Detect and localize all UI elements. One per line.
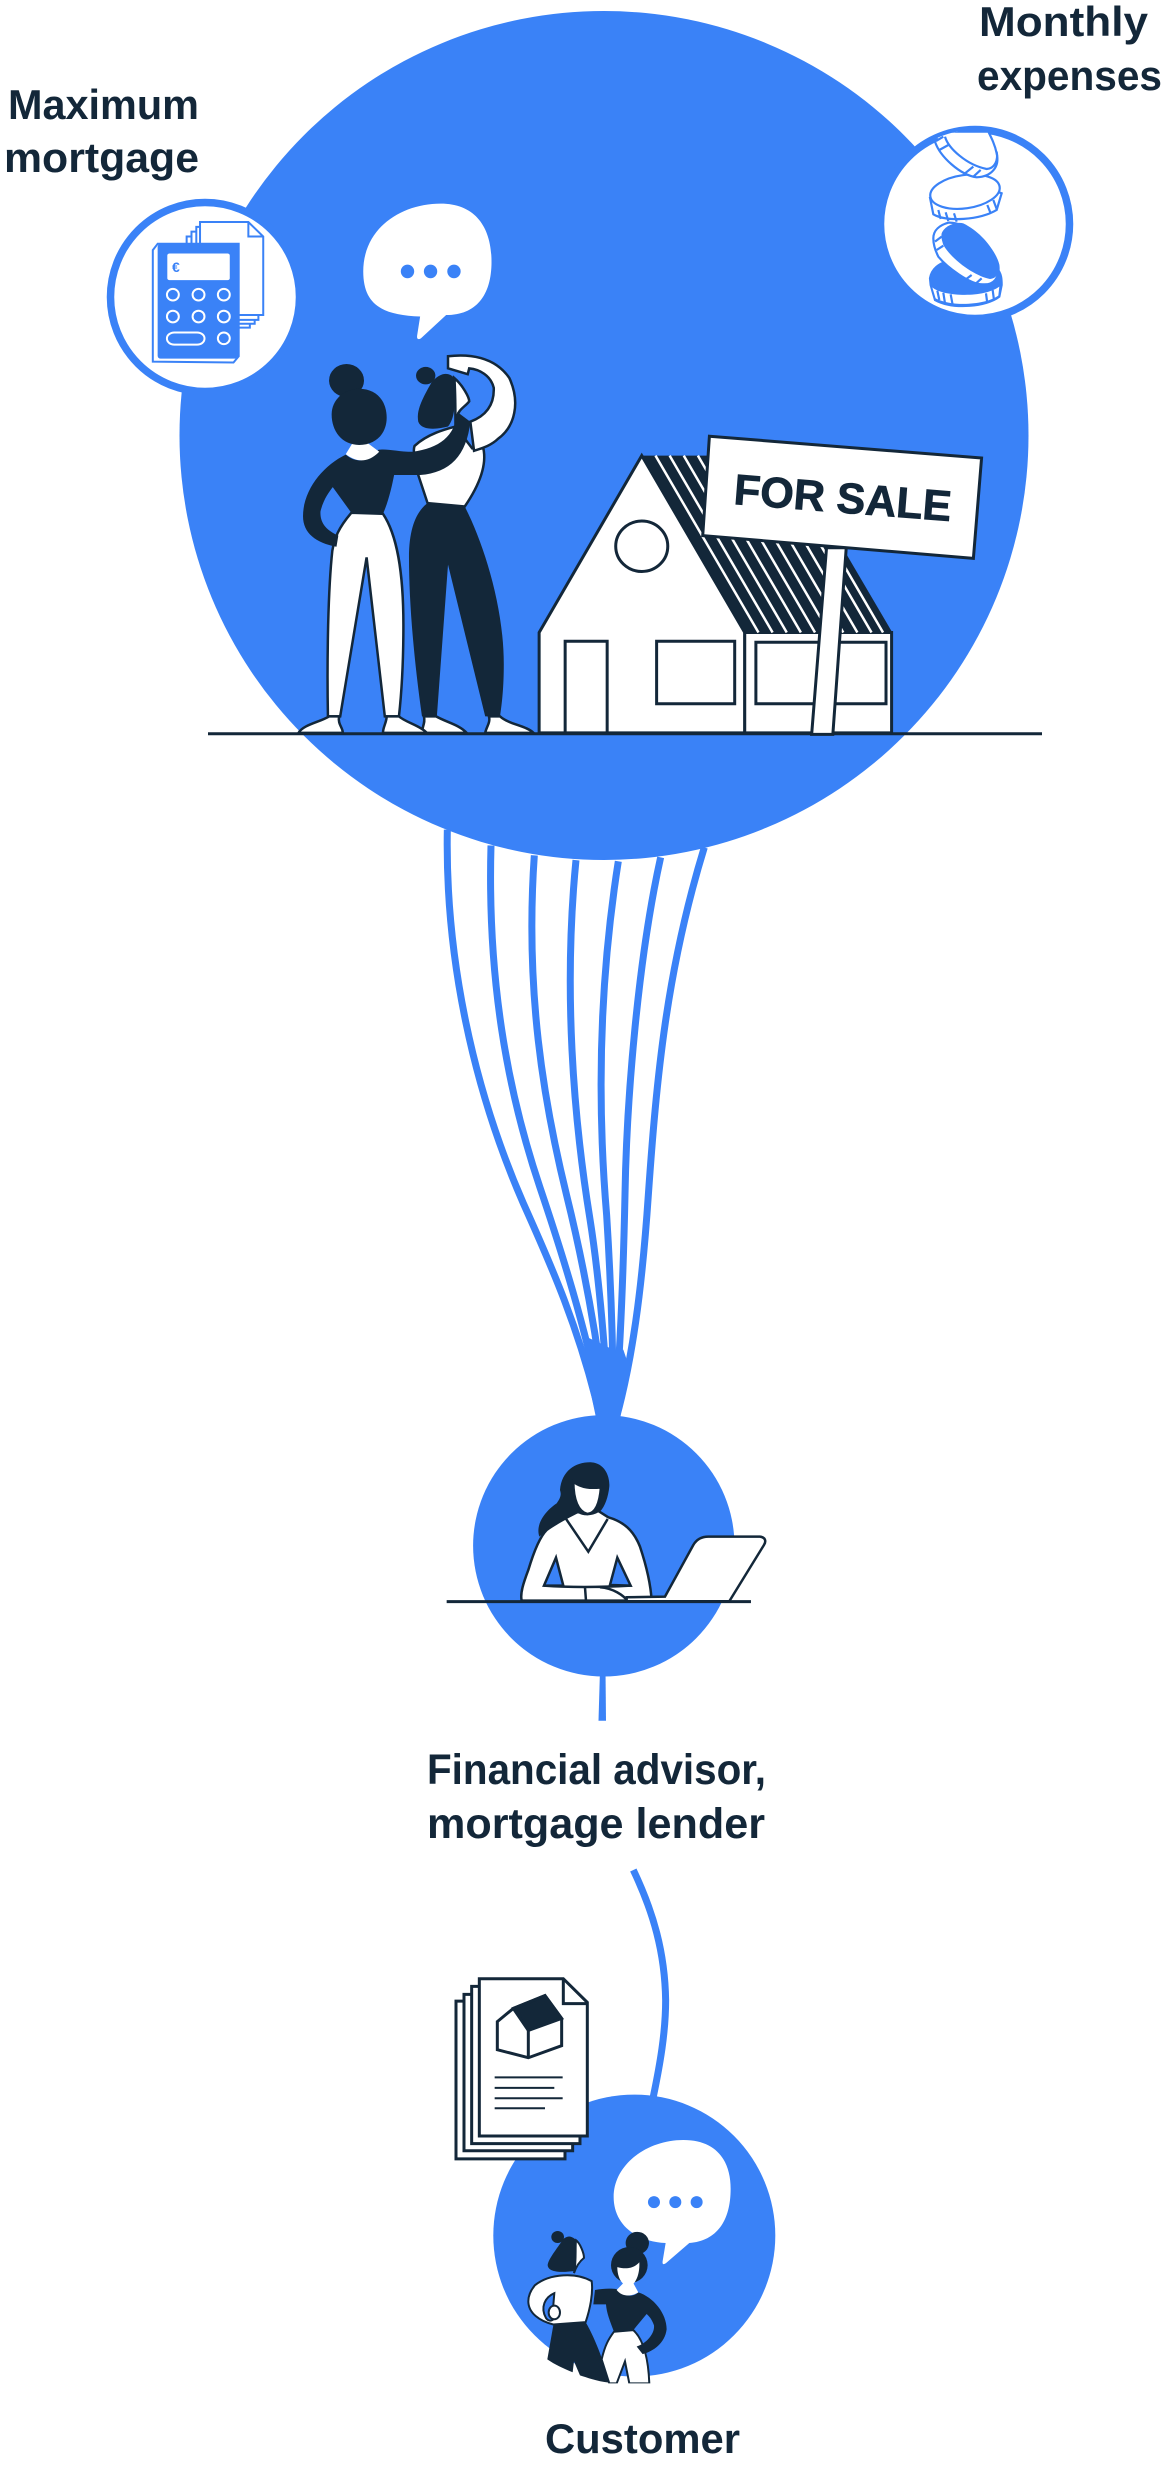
heading: customer: Customer [545,2415,740,2462]
heading: financial advisor, mortgage lender [427,1746,766,1848]
heading: financial advisor, mortgage lender: Financial advisor, [427,1746,766,1794]
connector: advisor to customer [633,1870,666,2097]
heading: maximum mortgage: Maximum [8,81,199,128]
icon: speech bubble (customer) [614,2140,731,2264]
figure: woman with bun, arm around partner [299,364,470,733]
figure: woman with raised arm [409,355,534,733]
heading: monthly expenses: expenses [977,52,1162,99]
for sale sign: FOR SALE [732,466,953,531]
heading: maximum mortgage: mortgage [4,134,199,181]
icon: calculator badge: € [172,259,180,275]
heading: monthly expenses [977,0,1162,99]
icon: document stack with house [456,1979,587,2159]
heading: financial advisor, mortgage lender: mortgage lender [427,1800,765,1848]
large blue circle [180,11,1028,860]
figure: advisor at laptop [447,1462,765,1602]
ground line (top scene) [208,732,1042,735]
for sale sign [703,436,982,734]
customer circle [493,2095,775,2377]
icon: coins badge [880,130,1070,318]
icon: speech bubble (large circle) [363,204,492,339]
heading: maximum mortgage [4,81,199,181]
icon: calculator badge [110,202,300,392]
connector: advisor to label [598,1670,606,1721]
figure: customer couple [528,2231,667,2383]
advisor circle [473,1415,734,1677]
house with striped roof [539,456,892,733]
funnel lines: seven paths converging on advisor [447,830,704,1421]
